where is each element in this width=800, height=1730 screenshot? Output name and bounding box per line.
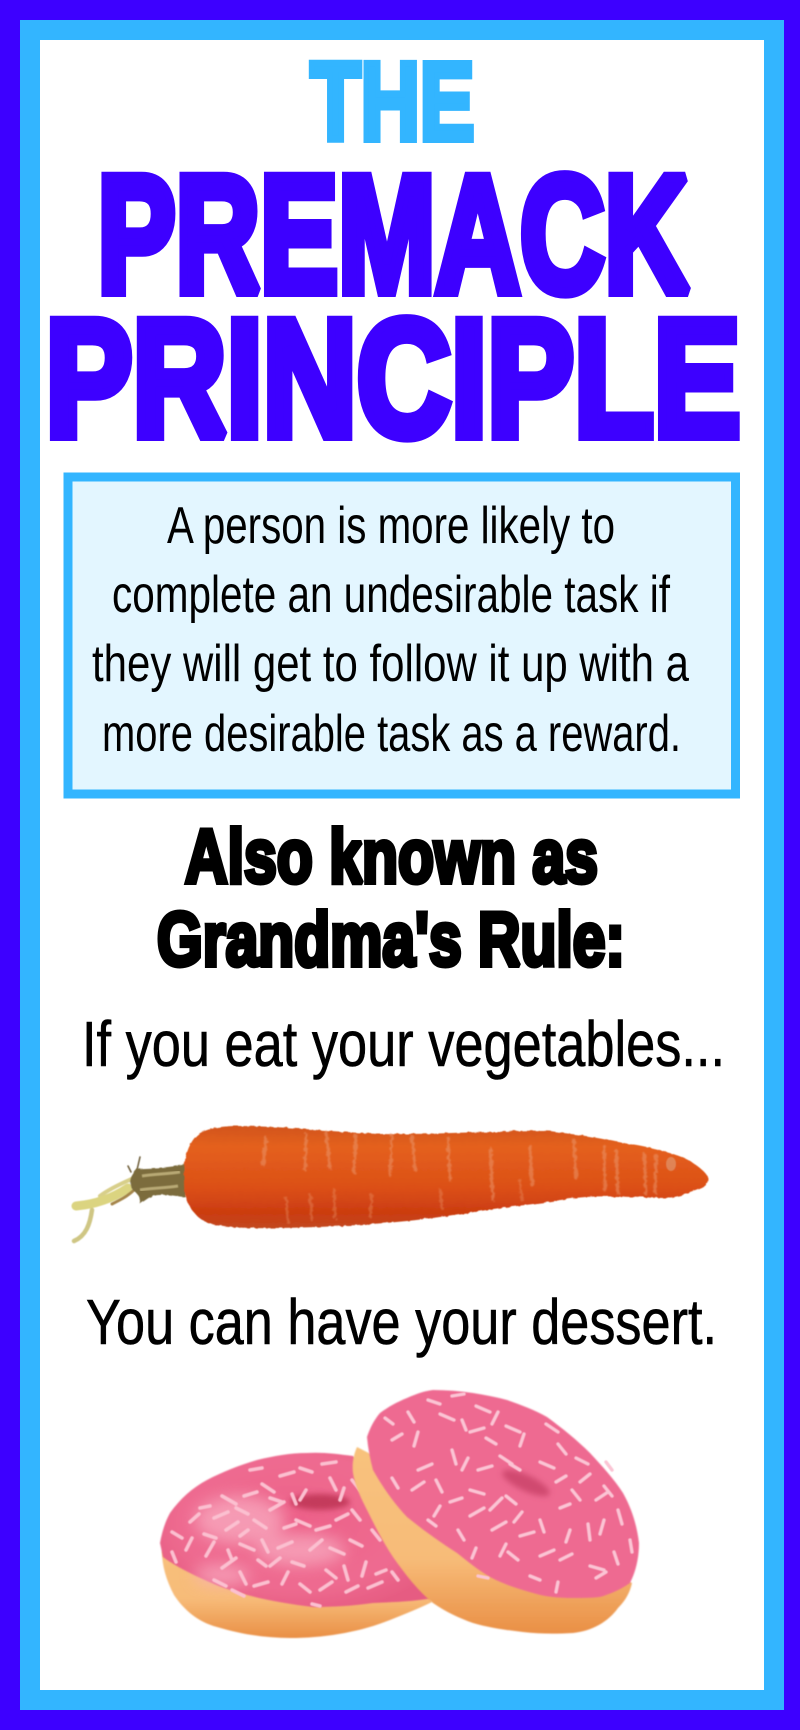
illustration: donuts: [160, 1390, 639, 1638]
right donut: [353, 1390, 639, 1634]
carrot tip highlight: [666, 1157, 676, 1171]
carrot body: [184, 1126, 708, 1228]
left donut: [160, 1453, 432, 1638]
title line: THE: THE: [310, 40, 474, 164]
right donut glaze: [367, 1390, 639, 1598]
right donut sprinkles: [385, 1394, 632, 1592]
left donut hole: [290, 1494, 350, 1510]
carrot skin ridges: [263, 1132, 656, 1222]
left donut base: [162, 1540, 432, 1638]
right donut base: [353, 1447, 632, 1634]
left donut pale sprinkle patches: [194, 1496, 345, 1585]
subheading: Also known as Grandma's Rule: Also known as: [185, 814, 598, 900]
title: [46, 40, 740, 472]
subheading: Also known as Grandma's Rule: Grandma's Rule:: [157, 898, 625, 982]
box background: [68, 477, 736, 794]
definition text: A person is more likely to: [167, 497, 615, 555]
definition text: [92, 497, 689, 763]
subheading: Also known as Grandma's Rule: [157, 814, 625, 982]
right donut hole: [499, 1465, 553, 1501]
carrot stem: [130, 1164, 186, 1204]
definition box: [68, 477, 736, 794]
illustration: carrot: [74, 1126, 708, 1241]
left donut glaze: [160, 1453, 432, 1607]
carrot roots: [74, 1157, 140, 1241]
left donut sprinkles: [172, 1462, 398, 1606]
